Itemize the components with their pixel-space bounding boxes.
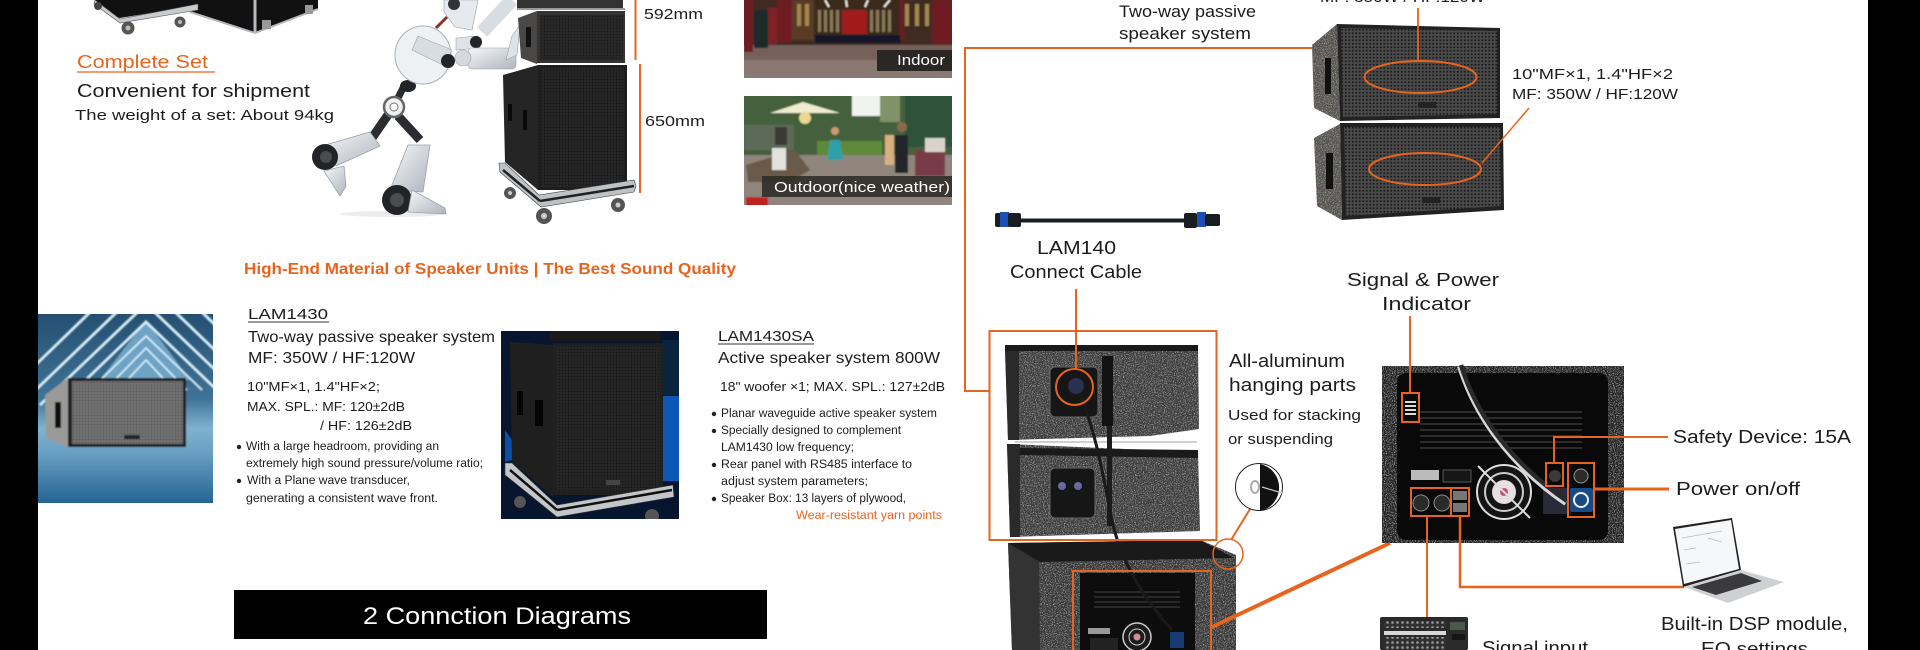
text block: LAM1430SA specifications: Wear-resistant yarn points [796,510,942,522]
text block: LAM1430SA specifications: Rear panel with RS485 interface to [721,459,912,471]
text block: LAM1430 specifications: generating a consistent wave front. [246,493,438,505]
cable [1080,395,1172,630]
text block: LAM1430 specifications: Two-way passive speaker system [248,329,495,346]
text: driver specifications: 10"MF×1, 1.4"HF×2 [1512,66,1673,83]
speaker stack with flight case [499,0,636,224]
icon: mixer [1380,617,1468,650]
speaker stack: rear view [1005,345,1236,650]
arrow: LAM140 cable callout [1056,289,1093,405]
text block: LAM1430SA specifications: Planar waveguide active speaker system [721,408,937,420]
photo: indoor venue [740,0,956,82]
text: signal and power indicator: Indicator [1382,294,1471,314]
label: indoor [877,50,952,71]
text block: LAM1430 specifications [237,306,495,505]
robot pushing speaker [312,0,520,217]
flight cases photo [94,0,318,34]
text: all-aluminum hanging parts: hanging parts [1229,375,1356,395]
text: LAM140 connect cable [1010,238,1142,282]
text: LAM140 connect cable: LAM140 [1037,238,1116,258]
waist [395,84,405,104]
dimension line and label: 650mm [640,64,705,193]
text: LAM140 connect cable: Connect Cable [1010,262,1142,282]
text block: LAM1430 specifications: MAX. SPL.: MF: 120±2dB [247,399,405,414]
head [444,0,478,30]
hip [384,97,404,117]
text: driver specifications [1512,66,1679,103]
banner: 2 connection diagrams: 2 Connction Diagrams [363,603,631,630]
heading: high-end material: High-End Material of Speaker Units | The Best Sound Quality [244,261,736,278]
text block: LAM1430SA specifications: LAM1430 low frequency; [721,442,854,454]
callout: power on/off [1568,463,1801,517]
text block: LAM1430 specifications: LAM1430 [248,306,328,323]
text: all-aluminum hanging parts: or suspending [1228,431,1333,448]
callout: safety device [1546,427,1851,486]
label: outdoor nice weather [762,176,952,197]
icon: LAM140 cable [995,212,1220,228]
text: convenient for shipment: Convenient for shipment [77,81,310,101]
text: built-in DSP module [1661,614,1848,650]
dimension line and label: 650mm: 650mm [645,113,705,130]
product image: LAM1430 on blue background [38,314,213,503]
callout frame: rear speakers [990,331,1216,540]
text block: LAM1430SA specifications: Speaker Box: 13 layers of plywood, [721,493,906,505]
text block: LAM1430SA specifications: 18" woofer ×1; MAX. SPL.: 127±2dB [720,379,945,394]
text: built-in DSP module: Built-in DSP module, [1661,614,1848,634]
speakers: front view pair [1312,24,1504,220]
subwoofer body [1008,540,1236,650]
text: two-way passive speaker system [1119,2,1256,43]
text block: LAM1430SA specifications [712,328,945,522]
icon: laptop [1673,518,1784,603]
text: driver specifications: MF: 350W / HF:120W [1512,86,1679,103]
callout: power on/off: Power on/off [1676,479,1801,499]
dimension line and label: 592mm: 592mm [644,6,703,23]
label: indoor: Indoor [897,52,945,69]
text block: LAM1430 specifications: With a large headroom, providing an [246,441,439,453]
left black side bar [0,0,38,650]
text block: LAM1430 specifications: 10"MF×1, 1.4"HF×2; [247,379,380,394]
dimension line and label: 592mm [636,0,703,60]
callout: indicator [1402,316,1419,422]
callout: DSP port line [1451,488,1684,587]
text: all-aluminum hanging parts: All-aluminum [1229,351,1345,371]
text: two-way passive speaker system: Two-way passive [1119,2,1256,21]
text block: LAM1430 specifications: / HF: 126±2dB [320,418,412,433]
text block: LAM1430 specifications: MF: 350W / HF:120W [248,350,416,367]
front leg [398,116,420,140]
arms [482,0,512,32]
callout: hanging part magnifier [1213,464,1282,569]
text block: LAM1430SA specifications: adjust system parameters; [721,476,868,488]
text block: LAM1430 specifications: extremely high sound pressure/volume ratio; [246,458,483,470]
text: all-aluminum hanging parts: Used for stacking [1228,407,1361,424]
banner: 2 connection diagrams [234,590,767,639]
product image: LAM1430SA subwoofer [501,331,679,523]
text block: LAM1430SA specifications: LAM1430SA [718,328,814,345]
text: complete set: Complete Set [77,52,208,72]
label: outdoor nice weather: Outdoor(nice weather) [774,179,950,196]
right black side bar [1868,0,1920,650]
callout frame: subwoofer rear panel [1073,571,1211,650]
back leg [372,112,390,138]
text block: LAM1430 specifications: With a Plane wave transducer, [247,475,410,487]
callout: signal input ports [1411,488,1451,617]
text: weight of a set: The weight of a set: About 94kg [75,107,334,124]
text block: LAM1430SA specifications: Active speaker system 800W [718,350,941,367]
callout: safety device: Safety Device: 15A [1673,427,1851,447]
text block: LAM1430SA specifications: Specially designed to complement [721,425,902,437]
arrow: orange connector from speakers to rear view [965,48,1312,391]
callout: driver ellipses [1364,8,1529,185]
text: all-aluminum hanging parts [1228,351,1361,448]
text: signal and power indicator: Signal & Power [1347,270,1499,290]
photo: outdoor event [744,96,952,205]
torso [395,26,451,84]
enlarged rear panel [1382,365,1624,543]
text: signal and power indicator [1347,270,1499,314]
arrow: thick diagonal to enlarged panel [1212,543,1390,627]
text: two-way passive speaker system: speaker system [1119,24,1251,43]
